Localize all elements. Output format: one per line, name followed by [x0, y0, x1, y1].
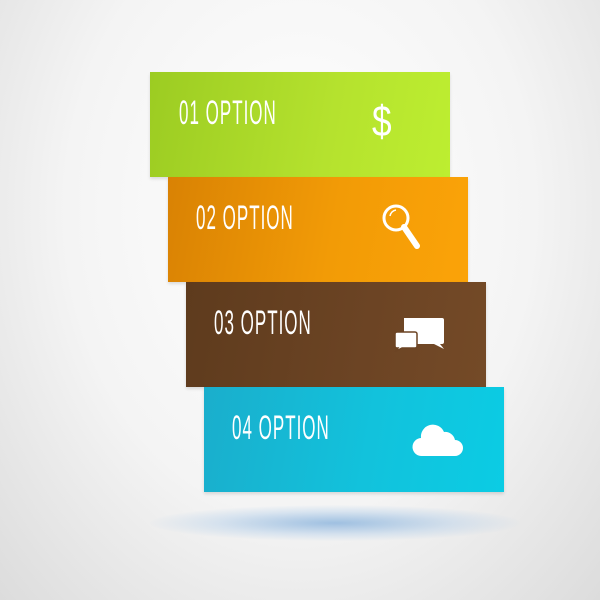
shadow [150, 505, 520, 541]
label 04: 04 OPTION [232, 409, 330, 447]
label 02: 02 OPTION [196, 199, 294, 237]
icon: chat bubbles [396, 318, 444, 349]
panel: option 02 [168, 177, 468, 282]
label 01: 01 OPTION [179, 94, 277, 132]
icon: cloud [412, 424, 463, 456]
panel: option 01 [150, 72, 450, 177]
panel: option 03 [186, 282, 486, 387]
icon: magnifier [382, 204, 420, 249]
label 03: 03 OPTION [214, 304, 312, 342]
panel: option 04 [204, 387, 504, 492]
icon: dollar: $ [372, 97, 392, 146]
